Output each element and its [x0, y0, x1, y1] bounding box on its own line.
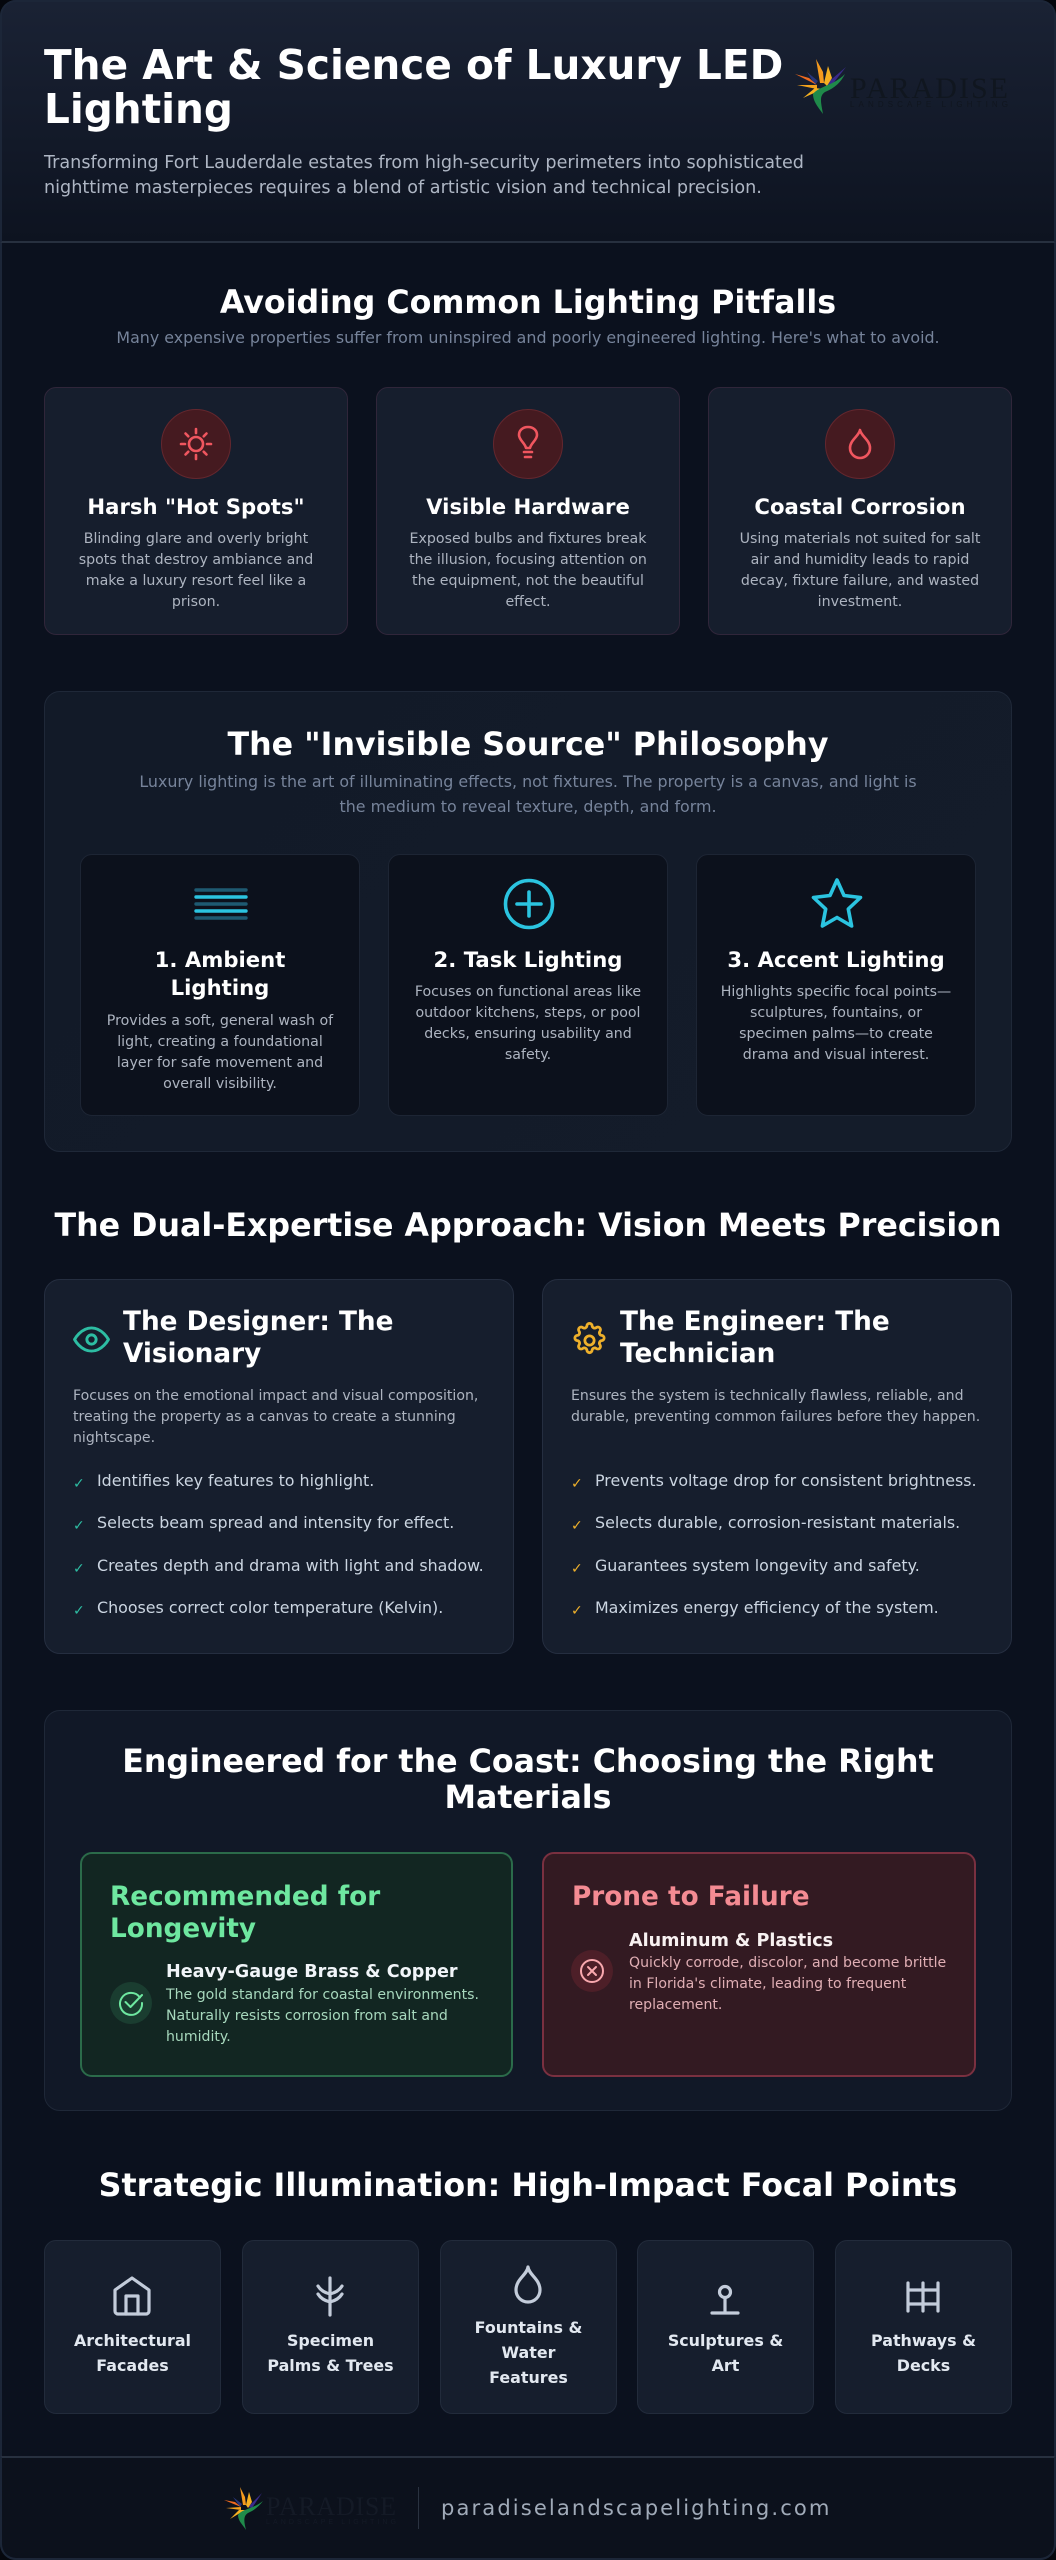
card text: make a luxury resort feel like a [86, 573, 306, 589]
card text: layer for safe movement and [117, 1055, 323, 1071]
panel: engineered for the coast [44, 1710, 1012, 2111]
section text: Luxury lighting is the art of illuminating effects, not fixtures. The property is a canvas, and light is [139, 772, 917, 791]
section heading: The "Invisible Source" Philosophy [228, 727, 828, 763]
card text [740, 531, 980, 610]
section heading: Engineered for the Coast: Choosing the Right [122, 1744, 934, 1780]
engineer checklist [571, 1471, 977, 1619]
card text: decay, fixture failure, and wasted [741, 573, 979, 589]
card text [409, 531, 647, 610]
card heading: Longevity [110, 1914, 256, 1944]
card title: Lighting [171, 975, 269, 1000]
icon: check circle [110, 1982, 152, 2024]
section text: the medium to reveal texture, depth, and form. [340, 797, 716, 816]
check mark: ✓ [571, 1561, 583, 1577]
logo: Paradise Landscape Lighting [795, 59, 1008, 114]
label: Facades [96, 2356, 169, 2375]
material name: Aluminum & Plastics [629, 1931, 833, 1951]
card text: Exposed bulbs and fixtures break [410, 531, 646, 547]
card title [155, 947, 285, 1000]
list item: Selects beam spread and intensity for effect. [97, 1513, 454, 1532]
card title: Coastal Corrosion [754, 494, 966, 519]
label: Architectural [74, 2331, 191, 2350]
footer [0, 2456, 1056, 2560]
icon: plus circle [504, 878, 554, 930]
card title: Harsh "Hot Spots" [87, 494, 305, 519]
icon: sun [161, 409, 231, 479]
engineer heading [620, 1307, 890, 1369]
card text: specimen palms—to create [739, 1026, 933, 1042]
card title: 2. Task Lighting [434, 947, 622, 972]
designer text: Focuses on the emotional impact and visual composition, [73, 1388, 478, 1404]
card text: the equipment, not the beautiful [412, 573, 644, 589]
material text: replacement. [629, 1997, 722, 2013]
card: pathways [835, 2240, 1012, 2414]
check mark: ✓ [73, 1476, 85, 1492]
material name: Heavy-Gauge Brass & Copper [166, 1962, 458, 1982]
icon: x circle [571, 1950, 613, 1992]
label: Palms & Trees [267, 2356, 394, 2375]
list item: Guarantees system longevity and safety. [595, 1556, 920, 1575]
card text: overall visibility. [163, 1076, 277, 1092]
card: fountains [440, 2240, 617, 2414]
section heading [122, 1744, 934, 1816]
logo: footer mark: PARADISE [266, 2492, 396, 2521]
label [668, 2331, 783, 2375]
subtitle: nighttime masterpieces requires a blend of artistic vision and technical precision. [44, 178, 762, 198]
designer text [73, 1388, 478, 1446]
check mark: ✓ [73, 1603, 85, 1619]
card text: investment. [818, 594, 902, 610]
card: prone to failure [542, 1852, 976, 2077]
panel: the engineer [542, 1279, 1012, 1654]
check mark: ✓ [571, 1476, 583, 1492]
label: Pathways & [871, 2331, 976, 2350]
card: architectural facades [44, 2240, 221, 2414]
icon: pathway grid [906, 2281, 940, 2313]
card text [415, 984, 641, 1063]
label: Features [489, 2368, 568, 2387]
card: specimen palms [242, 2240, 419, 2414]
icon: water drop [825, 409, 895, 479]
section heading: dual expertise: The Dual-Expertise Approach: Vision Meets Precision [54, 1208, 1002, 1244]
list item: Selects durable, corrosion-resistant materials. [595, 1513, 960, 1532]
card heading: Recommended for [110, 1882, 380, 1912]
logo: footer mark: LANDSCAPE LIGHTING [266, 2519, 396, 2526]
card text [79, 531, 313, 610]
designer text: treating the property as a canvas to create a stunning [73, 1409, 456, 1425]
main title: The Art & Science of Luxury LED [44, 41, 783, 89]
designer heading [123, 1307, 394, 1369]
label: Water [502, 2343, 555, 2362]
section heading: pitfalls: Avoiding Common Lighting Pitfalls [220, 285, 836, 321]
panel: the designer [44, 1279, 514, 1654]
card text: sculptures, fountains, or [750, 1005, 922, 1021]
card heading [110, 1882, 380, 1944]
material text: in Florida's climate, leading to frequent [629, 1976, 906, 1992]
icon: light bulb [493, 409, 563, 479]
card: accent [696, 854, 976, 1116]
designer checklist [73, 1471, 484, 1619]
label: Specimen [287, 2331, 374, 2350]
label: Sculptures & [668, 2331, 783, 2350]
icon: gear [574, 1322, 606, 1354]
label: Art [712, 2356, 739, 2375]
icon: eye [73, 1326, 110, 1352]
card text: Using materials not suited for salt [740, 531, 980, 547]
card text: Focuses on functional areas like [415, 984, 641, 1000]
panel: invisible source philosophy [44, 691, 1012, 1152]
designer heading: Visionary [123, 1339, 261, 1369]
material text: humidity. [166, 2029, 231, 2045]
label [475, 2318, 582, 2387]
check mark: ✓ [73, 1518, 85, 1534]
list item: Prevents voltage drop for consistent brightness. [595, 1471, 977, 1490]
card text [721, 984, 951, 1063]
card text: spots that destroy ambiance and [79, 552, 313, 568]
card text: outdoor kitchens, steps, or pool [415, 1005, 641, 1021]
label [836, 2328, 1011, 2378]
header [0, 0, 1056, 243]
material text: Naturally resists corrosion from salt and [166, 2008, 448, 2024]
icon: palm [316, 2276, 344, 2317]
card text: prison. [172, 594, 220, 610]
icon: sculpture [710, 2284, 740, 2315]
subtitle [44, 153, 804, 198]
engineer text [571, 1388, 980, 1425]
card text: effect. [505, 594, 551, 610]
card: sculptures [637, 2240, 814, 2414]
card text: drama and visual interest. [743, 1047, 929, 1063]
main title: Lighting [44, 85, 233, 133]
subtitle: Transforming Fort Lauderdale estates from high-security perimeters into sophisticated [44, 153, 804, 173]
logo: footer mark [224, 2487, 414, 2531]
card: recommended [80, 1852, 513, 2077]
engineer heading: The Engineer: The [620, 1307, 890, 1337]
icon: fountain drop [514, 2265, 542, 2304]
logo: Paradise Landscape Lighting: LANDSCAPE LIGHTING [850, 100, 1008, 109]
card text: light, creating a foundational [117, 1034, 323, 1050]
icon: house [113, 2276, 151, 2316]
section heading: focal points: Strategic Illumination: High-Impact Focal Points [99, 2168, 957, 2204]
designer text: nightscape. [73, 1430, 155, 1446]
list item: Maximizes energy efficiency of the system. [595, 1598, 939, 1617]
section heading: Materials [444, 1780, 612, 1816]
section subtitle: pitfalls: Many expensive properties suffer from uninspired and poorly engineered lighting. Here's what to avoid. [116, 328, 940, 347]
card text: Provides a soft, general wash of [107, 1013, 333, 1029]
section text [139, 772, 917, 816]
icon: star [812, 878, 862, 928]
designer heading: The Designer: The [123, 1307, 394, 1337]
card text: safety. [505, 1047, 551, 1063]
icon: ambient lines [194, 888, 248, 920]
card text [107, 1013, 334, 1092]
footer divider [418, 2487, 419, 2529]
material text: Quickly corrode, discolor, and become brittle [629, 1955, 946, 1971]
engineer text: Ensures the system is technically flawless, reliable, and [571, 1388, 964, 1404]
label [74, 2331, 191, 2375]
check mark: ✓ [73, 1561, 85, 1577]
card title: 3. Accent Lighting [727, 947, 945, 972]
material text [166, 1987, 479, 2045]
card: task [388, 854, 668, 1116]
list item: Identifies key features to highlight. [97, 1471, 374, 1490]
card text: Highlights specific focal points— [721, 984, 951, 1000]
list item: Creates depth and drama with light and shadow. [97, 1556, 484, 1575]
card text: decks, ensuring usability and [424, 1026, 632, 1042]
list item: Chooses correct color temperature (Kelvin). [97, 1598, 443, 1617]
panel: coastal corrosion [708, 387, 1012, 635]
card heading: Prone to Failure [572, 1882, 810, 1912]
engineer text: durable, preventing common failures before they happen. [571, 1409, 980, 1425]
label: Decks [897, 2356, 950, 2375]
panel: harsh hot spots [44, 387, 348, 635]
panel: visible hardware [376, 387, 680, 635]
main title [44, 41, 783, 133]
material text: The gold standard for coastal environments. [166, 1987, 479, 2003]
card: ambient [80, 854, 360, 1116]
card text: Blinding glare and overly bright [84, 531, 308, 547]
label: Fountains & [475, 2318, 582, 2337]
material text [629, 1955, 946, 2013]
check mark: ✓ [571, 1518, 583, 1534]
logo: Paradise Landscape Lighting: PARADISE [850, 72, 1008, 105]
engineer heading: Technician [620, 1339, 775, 1369]
card title: 1. Ambient [155, 947, 285, 972]
card text: the illusion, focusing attention on [409, 552, 647, 568]
card title: Visible Hardware [426, 494, 630, 519]
website url: paradiselandscapelighting.com [441, 2495, 832, 2520]
check mark: ✓ [571, 1603, 583, 1619]
card text: air and humidity leads to rapid [751, 552, 969, 568]
label [267, 2331, 394, 2375]
